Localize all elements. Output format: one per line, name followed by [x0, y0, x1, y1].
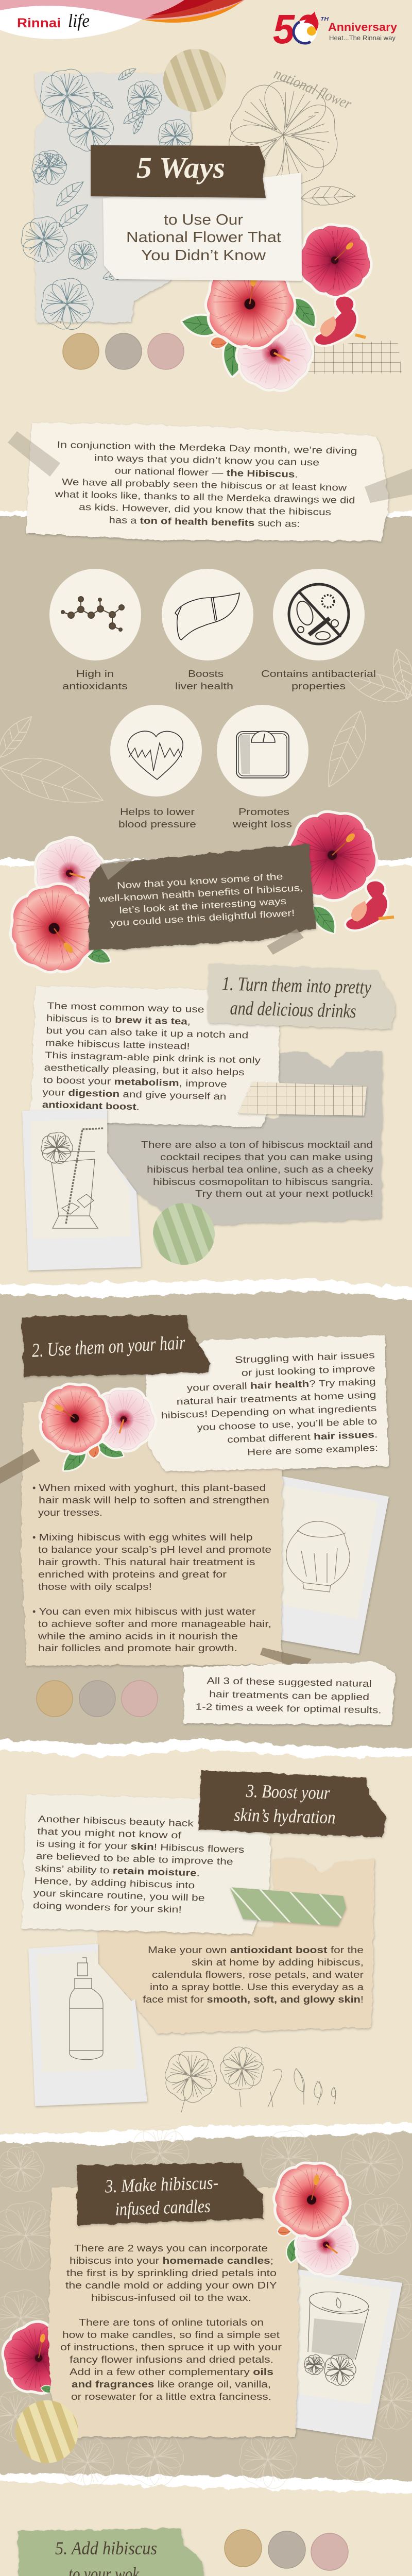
icon: glass	[39, 1128, 104, 1228]
heading 2	[22, 1315, 210, 1377]
benefit: weight loss: weight loss	[232, 819, 292, 829]
heading 3	[198, 1770, 386, 1837]
striped round sticker	[163, 49, 226, 112]
heading 4: infused candles	[115, 2196, 211, 2219]
sketch hibiscus with caption	[204, 63, 359, 214]
note: all 3: hair treatments can be applied	[209, 1689, 369, 1702]
polaroid: candle	[288, 2269, 402, 2439]
note: hair intro: Here are some examples:	[247, 1443, 378, 1458]
50th anniversary logo: Heat...The Rinnai way	[329, 34, 396, 42]
gray paper	[108, 1050, 382, 1226]
title tape: 5 Ways: 5 Ways	[136, 151, 225, 184]
logo: Rinnai: Rinnai	[17, 16, 61, 30]
tan paper: hair tips: while the amino acids in it nourish the	[38, 1631, 238, 1641]
green striped sticker	[153, 1203, 215, 1265]
heading 4	[77, 2163, 264, 2225]
icon: bottle	[70, 1958, 103, 2060]
intro note: as kids. However, did you know that the hibiscus	[79, 502, 331, 517]
heading 3: skin’s hydration	[234, 1804, 336, 1827]
note: hair intro: combat different hair issues .	[227, 1429, 378, 1445]
benefit: antioxidants: High in	[76, 669, 114, 679]
tan paper: hair tips: those with oily scalps!	[38, 1582, 152, 1592]
tan paper: antioxidant boost	[98, 1859, 374, 2033]
note: skin: Hence, by adding hibiscus into	[34, 1875, 195, 1890]
tan paper: hair tips	[21, 1402, 282, 1666]
note: drinks body: This instagram-able pink drink is not only	[45, 1050, 261, 1065]
icon: pot	[286, 1521, 350, 1592]
intro note: what it looks like, thanks to all the Merdeka drawings we did	[54, 489, 355, 505]
note: drinks body: make hibiscus latte instead!	[45, 1038, 190, 1052]
text: mocktail: hibiscus herbal tea online, such as a cheeky	[147, 1164, 373, 1175]
tan paper: candles: the first is by sprinkling dried petals into	[66, 2268, 277, 2278]
yellow striped sticker	[15, 2400, 78, 2463]
tan paper: candles: or rosewater for a little extra fanciness.	[71, 2392, 271, 2402]
background band: kraft 2	[0, 1280, 412, 1758]
tape left	[0, 1449, 40, 1484]
hair section flowers	[26, 1368, 159, 1475]
tan paper: hair tips: •	[32, 1483, 36, 1493]
decorative leaf: right	[316, 647, 412, 793]
dark transition note: you could use this delightful flower!	[110, 908, 295, 928]
title: rest	[126, 212, 281, 264]
grid tape	[238, 1082, 367, 1116]
tan paper: hair tips: to balance your scalp’s pH level and promote	[38, 1545, 271, 1555]
note: all 3: 1-2 times a week for optimal results.	[195, 1702, 382, 1715]
benefit: liver: Boosts	[188, 669, 224, 679]
header swoosh with Rinnai life logo	[0, 0, 245, 39]
title: rest: National Flower That	[126, 229, 281, 246]
text: antioxidant boost: skin at home by adding hibiscus,	[192, 1957, 364, 1968]
color swatches	[37, 1681, 158, 1717]
text: antioxidant boost: Make your own antioxidant boost for the	[148, 1945, 364, 1955]
note: drinks body: aesthetically pleasing, but it also helps	[44, 1062, 245, 1077]
icon: heart with pulse	[128, 731, 183, 779]
icon: liver	[175, 593, 239, 640]
text: antioxidant boost: calendula flowers, rose petals, and water	[152, 1970, 364, 1980]
note: all 3	[184, 1662, 396, 1725]
note: drinks body: to boost your metabolism , improve	[43, 1075, 227, 1089]
text: mocktail: hibiscus cosmopolitan to hibiscus sangria.	[153, 1177, 373, 1187]
background band: kraft 3 with floral pattern	[0, 2123, 412, 2494]
intro note: In conjunction with the Merdeka Day month, we’re diving	[57, 439, 357, 456]
tan paper: hair tips: to achieve softer and more manageable hair,	[38, 1619, 271, 1629]
title: rest: You Didn’t Know	[141, 247, 266, 264]
note: drinks body: your digestion and give yourself an	[42, 1087, 227, 1101]
icon: weighing scale	[236, 731, 289, 778]
title: rest: to Use Our	[164, 212, 243, 228]
candle section flowers	[264, 2157, 364, 2284]
hero flower bouquet	[180, 216, 402, 395]
heading 1	[208, 963, 396, 1029]
note: hair intro: or just looking to improve	[241, 1363, 375, 1378]
note: hair intro	[146, 1335, 388, 1471]
note: skin: are believed to be able to improve the	[36, 1851, 233, 1867]
benefit: weight loss	[217, 705, 308, 829]
text: mocktail: cocktail recipes that you can make using	[160, 1152, 373, 1162]
color swatches	[63, 333, 184, 369]
icon: bacteria with ban sign	[289, 584, 349, 644]
note: skin	[22, 1794, 270, 1934]
note: hair intro: Struggling with hair issues	[235, 1350, 375, 1365]
note: skin: doing wonders for your skin!	[33, 1900, 182, 1915]
note: hair intro: you choose to use, you’ll be able to	[197, 1416, 377, 1433]
heading 5: 5. Add hibiscus	[55, 2538, 157, 2558]
polaroid: spray bottle	[28, 1944, 147, 2106]
note: hair intro: natural hair treatments at home using	[176, 1389, 376, 1407]
benefit: blood pressure	[110, 705, 202, 829]
benefit: antibacterial: Contains antibacterial	[261, 669, 376, 679]
floral line pattern on kraft	[0, 2125, 412, 2493]
heading 1: and delicious drinks	[230, 997, 356, 1022]
50th anniversary logo: 50	[273, 6, 316, 52]
note: drinks body: The most common way to use	[47, 1001, 204, 1014]
text: mocktail: Try them out at your next potluck!	[195, 1189, 373, 1199]
floral torn paper panel	[18, 65, 195, 333]
tan paper: candles: Add in a few other complementary oils	[70, 2367, 273, 2377]
dark transition note: well-known health benefits of hibiscus,	[98, 883, 303, 904]
50th anniversary logo	[273, 6, 398, 52]
note: all 3: All 3 of these suggested natural	[207, 1675, 372, 1689]
color swatches	[225, 2530, 348, 2570]
background band: kraft 1	[0, 511, 412, 866]
benefit: antioxidants: antioxidants	[62, 681, 128, 691]
50th anniversary logo: Anniversary	[328, 21, 398, 33]
heading 5	[18, 2528, 203, 2576]
tan paper: hair tips: •	[32, 1532, 36, 1543]
tan paper: candles: hibiscus into your homemade candles ;	[70, 2256, 273, 2266]
title note	[103, 173, 302, 281]
decorative leaf: left	[0, 710, 110, 817]
tan paper: hair tips: You can even mix hibiscus with just water	[39, 1606, 256, 1617]
tan paper: hair tips: hair growth. This natural hair treatment is	[38, 1557, 255, 1567]
transition flowers	[0, 801, 394, 992]
benefit: weight loss: Promotes	[238, 807, 289, 817]
sketch flowers row	[157, 2037, 336, 2112]
intro note: our national flower — the Hibiscus .	[114, 465, 298, 480]
tan paper: candles	[48, 2187, 299, 2437]
heading 3: 3. Boost your	[245, 1781, 331, 1803]
text: antioxidant boost	[143, 1945, 364, 2005]
tan paper: hair tips: hair follicles and promote hair growth.	[38, 1643, 237, 1653]
tan paper: hair tips: hair mask will help to soften and strengthen	[39, 1495, 269, 1505]
tan paper: candles: hibiscus-infused oil to the wax.	[91, 2293, 251, 2303]
50th anniversary logo: TH	[320, 16, 329, 22]
benefit: antibacterial: properties	[291, 681, 346, 691]
text: mocktail	[141, 1140, 373, 1199]
dark transition note	[89, 844, 315, 955]
text: mocktail: There are also a ton of hibiscus mocktail and	[141, 1140, 373, 1150]
tan paper: candles: and fragrances like orange oil, vanilla,	[72, 2379, 271, 2389]
intro note	[8, 422, 412, 541]
dark transition note: let’s look at the interesting ways	[119, 896, 287, 916]
note: skin: skins’ ability to retain moisture .	[35, 1863, 200, 1878]
tan paper: hair tips: your tresses.	[38, 1507, 102, 1518]
benefit: blood pressure: Helps to lower	[120, 807, 195, 817]
tan paper: candles: of instructions, then spruce it up with your	[60, 2342, 282, 2352]
benefit: liver: liver health	[175, 681, 233, 691]
hibiscus sticker clipped by paper: red	[0, 2313, 89, 2409]
tan paper: hair tips: Mixing hibiscus with egg whites will help	[39, 1532, 252, 1543]
green striped tape	[230, 1887, 346, 1926]
note: drinks body	[30, 986, 280, 1127]
heading 2: 2. Use them on your hair	[31, 1332, 186, 1362]
icon: molecule	[61, 597, 124, 631]
tan paper: candles: There are 2 ways you can incorporate	[74, 2243, 268, 2253]
tan paper: hair tips: When mixed with yoghurt, this plant-based	[39, 1483, 266, 1493]
note: drinks body: hibiscus is to brew it as tea ,	[46, 1013, 191, 1027]
tan paper: candles: how to make candles, so find a simple set	[62, 2330, 280, 2340]
text: antioxidant boost: face mist for smooth, soft, and glowy skin !	[143, 1994, 364, 2005]
note: skin: your skincare routine, you will be	[33, 1888, 205, 1903]
note: skin: is using it for your skin ! Hibiscus flowers	[36, 1838, 245, 1855]
benefit: antioxidants	[49, 569, 141, 691]
title tape: 5 Ways	[91, 145, 266, 198]
polaroid: pot	[242, 1473, 389, 1654]
polaroid: drink	[22, 1109, 141, 1270]
tape on polaroid	[260, 1648, 312, 1670]
intro note: We have all probably seen the hibiscus or at least know	[62, 477, 348, 493]
note: drinks body: but you can also take it up a notch and	[46, 1025, 249, 1040]
tan paper: candles: fancy flower infusions and dried petals.	[70, 2354, 273, 2365]
note: hair intro: your overall hair health ? Try making	[186, 1376, 376, 1393]
tan paper: hair tips: enriched with proteins and great for	[38, 1569, 227, 1580]
logo: life: life	[68, 10, 90, 31]
small leaf by red hibiscus	[40, 2384, 56, 2395]
tan paper: candles: the candle mold or adding your own DIY	[65, 2280, 277, 2291]
note: drinks body: antioxidant boost .	[42, 1099, 140, 1112]
note: hair intro: hibiscus! Depending on what ingredients	[161, 1403, 377, 1420]
text: antioxidant boost: into a spray bottle. Use this everyday as a	[150, 1982, 364, 1992]
note: skin: Another hibiscus beauty hack	[38, 1814, 194, 1828]
dark transition note: Now that you know some of the	[116, 871, 283, 891]
intro note: has a ton of health benefits such as:	[109, 515, 300, 529]
benefit: blood pressure: blood pressure	[118, 819, 196, 829]
icon: candle	[303, 2289, 370, 2388]
heading 4: 3. Make hibiscus-	[104, 2172, 219, 2197]
benefit: liver	[162, 569, 253, 691]
heading 1: 1. Turn them into pretty	[221, 973, 371, 998]
benefit: antibacterial	[261, 569, 376, 691]
note: skin: that you might not know of	[37, 1826, 182, 1841]
tan paper: hair tips: •	[32, 1606, 36, 1617]
tan paper: candles: There are tons of online tutorials on	[79, 2317, 264, 2328]
sketch hibiscus with caption: national flower	[271, 65, 354, 113]
intro note: into ways that you didn’t know you can use	[94, 452, 319, 468]
